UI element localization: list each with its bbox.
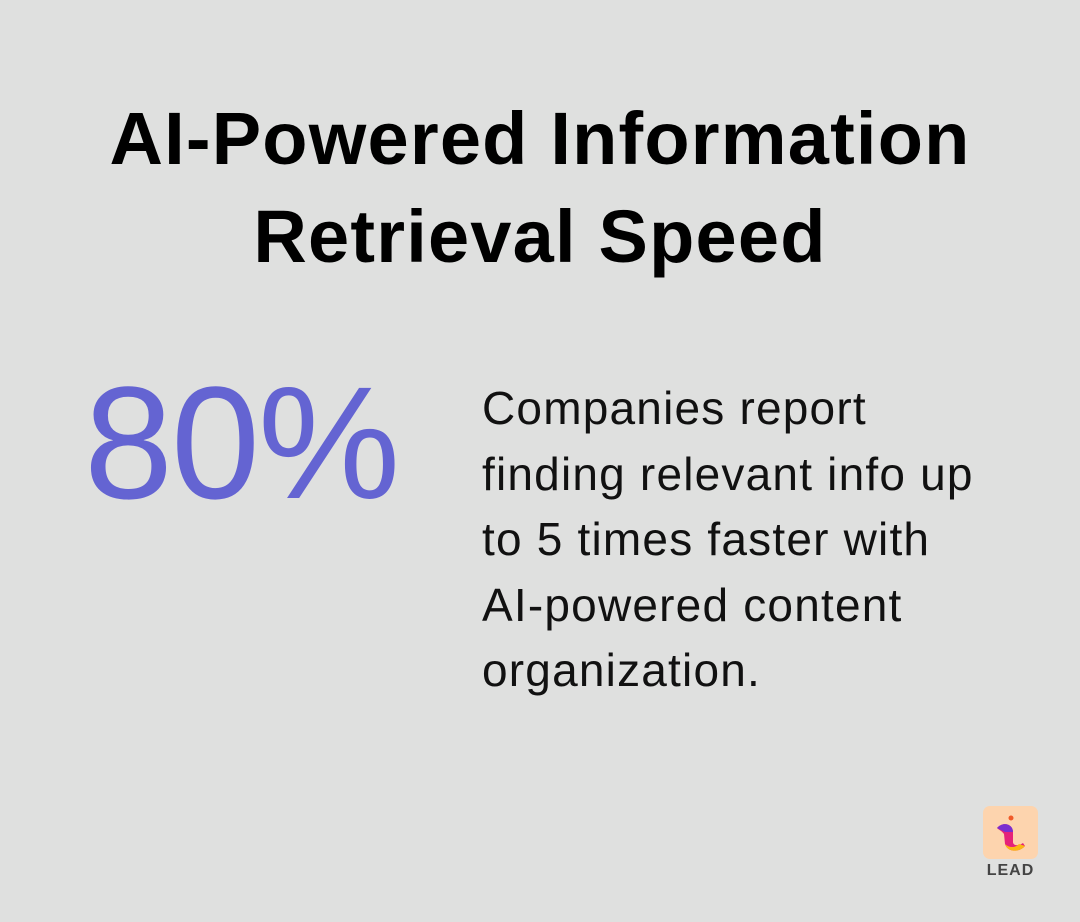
logo text: LEAD — [987, 862, 1034, 879]
title — [110, 97, 970, 278]
description text: to 5 times faster with — [482, 513, 930, 565]
stat number: 80% — [84, 353, 398, 532]
logo — [983, 806, 1038, 879]
description text: organization. — [482, 644, 761, 696]
title: Retrieval Speed — [253, 195, 827, 278]
description text — [482, 382, 974, 696]
description text: AI-powered content — [482, 578, 903, 630]
icon: logo mark — [983, 806, 1038, 859]
title: AI-Powered Information — [110, 97, 970, 180]
description text: Companies report — [482, 382, 867, 434]
description text: finding relevant info up — [482, 448, 974, 500]
